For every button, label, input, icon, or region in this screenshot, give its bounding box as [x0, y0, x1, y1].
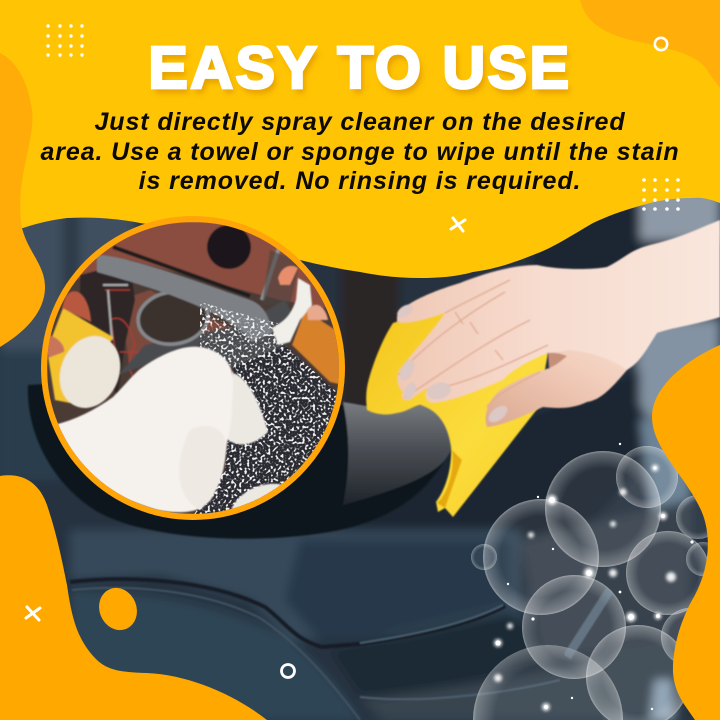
dot grid top right: [642, 178, 680, 211]
description text: [40, 108, 680, 195]
spray can: [292, 310, 343, 385]
bottom left orange blob: [0, 475, 267, 720]
speckle texture: [194, 302, 337, 514]
title: EASY TO USE: [148, 35, 572, 101]
small orange dot: [93, 582, 143, 636]
black knob: [207, 225, 251, 269]
yellow cloth: [366, 305, 548, 517]
right orange blob: [652, 345, 720, 720]
grey arm: [97, 255, 272, 342]
yellow header wave: [0, 0, 720, 278]
machinery at left: [80, 262, 135, 395]
hand: [395, 220, 720, 427]
left orange blob: [0, 53, 45, 347]
ring top right: [655, 38, 667, 50]
armrest: [28, 380, 452, 539]
circular inset photo of spray foam cleaning: [41, 216, 345, 520]
cross markers: [26, 218, 465, 620]
door pocket trim lines: [70, 579, 560, 720]
fingers on bottle: [62, 291, 91, 322]
side mirror: [136, 292, 210, 347]
description text: Just directly spray cleaner on the desired: [94, 108, 626, 136]
top right orange blob: [580, 0, 720, 88]
sparkles: [494, 443, 694, 711]
brick wall: [76, 222, 326, 308]
dot grid top left: [46, 24, 84, 57]
soap bubbles: [471, 446, 720, 720]
ring bottom: [282, 664, 294, 678]
speckled sill and door: [118, 300, 298, 375]
description text: area. Use a towel or sponge to wipe until the stain: [40, 138, 680, 166]
description text: is removed. No rinsing is required.: [139, 167, 581, 195]
yellow bottle: [47, 308, 113, 405]
foam pile: [228, 373, 268, 444]
